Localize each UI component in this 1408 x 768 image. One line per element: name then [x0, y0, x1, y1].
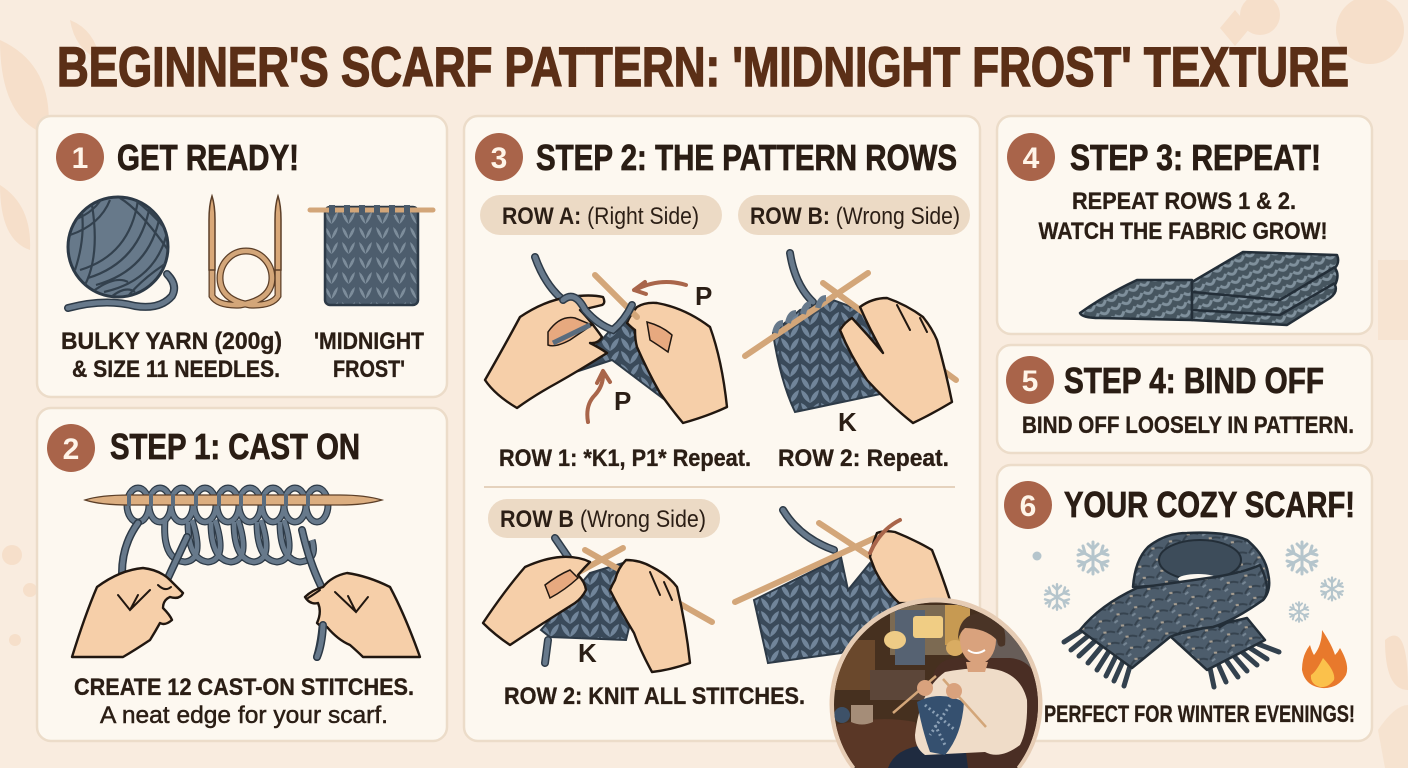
row 2 knit caption: ROW 2: KNIT ALL STITCHES.: [504, 683, 805, 710]
bind off caption: BIND OFF LOOSELY IN PATTERN.: [1022, 412, 1354, 439]
panel 1: get ready: [37, 116, 447, 397]
illustration: scarf: [1064, 533, 1279, 687]
illustration: row 2 hands: [745, 253, 956, 437]
heading: step 4: STEP 4: BIND OFF: [1064, 360, 1324, 401]
label: row B wrong side: ROW B (Wrong Side): [500, 506, 706, 533]
step number 5: [1006, 356, 1054, 404]
repeat caption: REPEAT ROWS 1 & 2.: [1072, 188, 1296, 215]
photo: woman knitting in armchair: [830, 600, 1045, 768]
divider: [484, 486, 955, 488]
supplies caption: BULKY YARN (200g): [61, 328, 282, 355]
panel 4: repeat: WATCH THE FABRIC GROW!: [1038, 218, 1328, 245]
step number 1: [56, 133, 104, 181]
step number 2: [47, 424, 95, 472]
illustration: folded fabric stack: [1080, 252, 1338, 325]
panel 3: pattern rows: [464, 116, 980, 741]
step number 6: [1004, 481, 1052, 529]
icon: yarn ball: [68, 197, 174, 308]
heading: step 2: STEP 2: THE PATTERN ROWS: [536, 137, 957, 178]
step number 4: [1007, 133, 1055, 181]
step number 4: 4: [1023, 142, 1040, 175]
illustration: row 1 hands: P: [695, 281, 712, 311]
row 1 caption: ROW 1: *K1, P1* Repeat.: [499, 445, 751, 472]
panel 2: cast on: A neat edge for your scarf.: [100, 702, 388, 729]
panel 2: cast on: [37, 408, 447, 741]
icon: flame: [1302, 630, 1347, 688]
illustration: row 1 hands: [485, 257, 727, 423]
label: row B: ROW B: (Wrong Side): [750, 203, 960, 230]
step number 1: 1: [72, 142, 88, 175]
icon: circular needles: [209, 196, 281, 305]
swatch caption: 'MIDNIGHT: [314, 328, 424, 355]
step number 3: 3: [491, 142, 507, 175]
step number 6: 6: [1020, 490, 1036, 523]
step number 3: [475, 133, 523, 181]
step number 2: 2: [63, 433, 79, 466]
label: row A: [480, 195, 722, 235]
panel 5: bind off: [997, 345, 1372, 453]
row 2 caption: ROW 2: Repeat.: [778, 445, 949, 472]
illustration: row 2 hands: K: [838, 407, 857, 437]
icon: knitted swatch: [310, 205, 433, 305]
illustration: finished knit rows: [735, 510, 950, 663]
label: row A: ROW A: (Right Side): [502, 203, 699, 230]
cast-on caption: CREATE 12 CAST-ON STITCHES.: [74, 674, 414, 701]
icon: snowflakes: [1032, 542, 1343, 622]
label: row B: [738, 195, 970, 235]
heading: step 3: STEP 3: REPEAT!: [1070, 137, 1321, 178]
panel 4: repeat: [997, 116, 1372, 334]
panel 1: get ready: & SIZE 11 NEEDLES.: [72, 356, 280, 383]
cast-on illustration: [72, 488, 420, 657]
heading: get ready: GET READY!: [117, 137, 299, 178]
heading: step 1: STEP 1: CAST ON: [110, 426, 360, 467]
label: row B wrong side: [488, 499, 720, 538]
illustration: knit row hands: K: [578, 638, 597, 668]
illustration: row 1 hands: P: [614, 386, 631, 416]
step number 5: 5: [1022, 365, 1038, 398]
panel 6: cozy scarf: [997, 465, 1372, 741]
panel 1: get ready: FROST': [333, 356, 405, 383]
illustration: knit row hands: [483, 538, 712, 672]
